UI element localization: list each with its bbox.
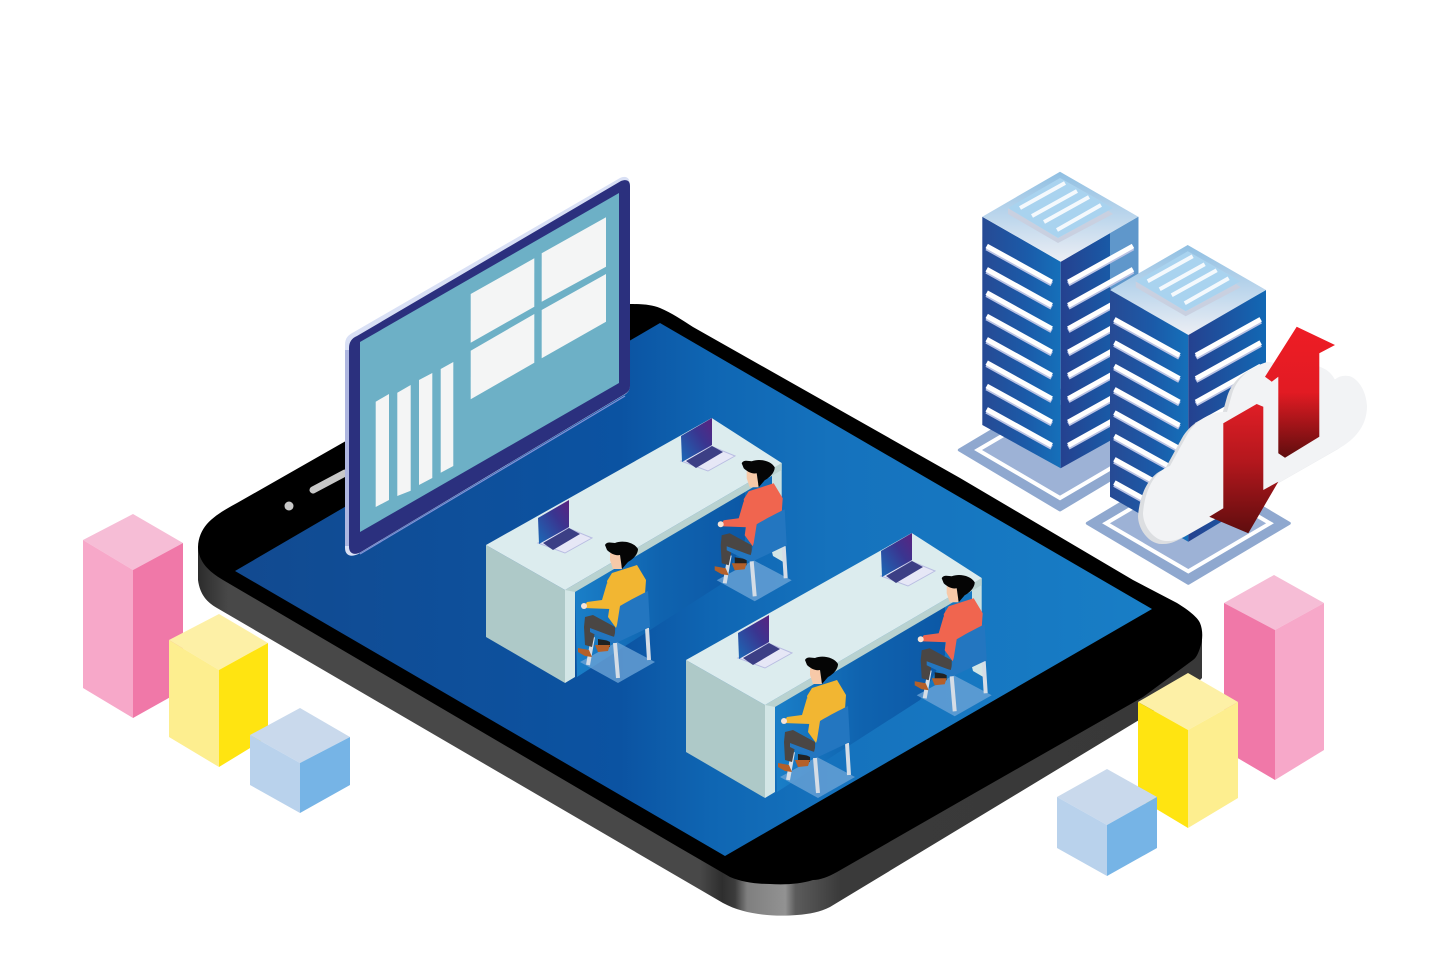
upload arrow	[1265, 327, 1335, 458]
tablet device body	[198, 304, 1202, 916]
download arrow	[1209, 404, 1278, 533]
left pink block	[83, 514, 183, 718]
window tiles on monitor	[471, 217, 606, 399]
monitor display panel	[360, 193, 619, 532]
floating dashboard monitor	[345, 177, 630, 556]
right blue cube	[1057, 769, 1157, 876]
desk 1 with laptops	[486, 418, 782, 683]
desk 2 with laptops	[686, 533, 982, 798]
bar chart on monitor	[376, 362, 453, 507]
person 3 yellow shirt	[778, 657, 855, 798]
person 2 salmon shirt	[715, 460, 792, 601]
right pink block	[1224, 575, 1324, 780]
tablet speaker and camera	[284, 473, 345, 510]
server tower 1	[982, 172, 1138, 468]
right yellow block	[1138, 673, 1238, 828]
left yellow block	[169, 614, 268, 767]
server tower 1 base	[959, 390, 1160, 510]
desk 2 far end panel	[972, 660, 985, 678]
desk 1 far end panel	[772, 545, 785, 563]
left blue cube	[250, 708, 350, 813]
person 4 salmon shirt	[915, 575, 992, 716]
server tower 2	[1110, 245, 1266, 542]
server tower 2 base	[1087, 463, 1289, 583]
person 1 yellow shirt	[578, 542, 655, 683]
tablet screen	[235, 323, 1152, 856]
cloud	[1138, 362, 1367, 544]
